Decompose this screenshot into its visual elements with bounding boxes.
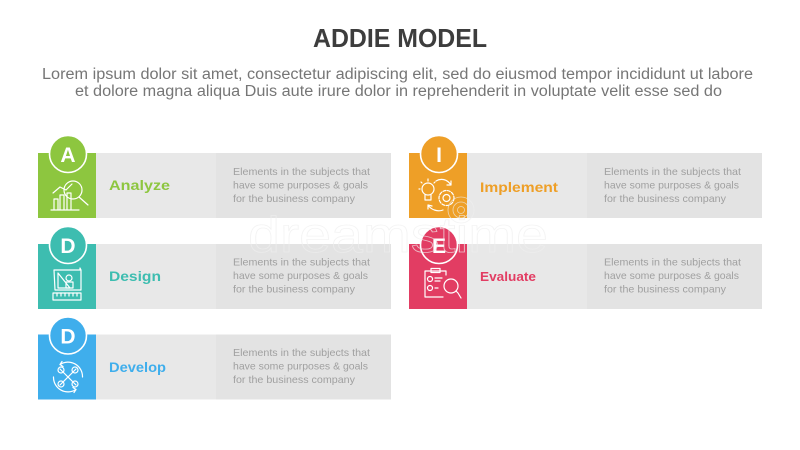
label: Analyze: Analyze — [109, 177, 170, 193]
panel: develop — [38, 317, 391, 400]
description: Analyze: have some purposes & goals — [233, 180, 368, 192]
panel: analyze — [38, 136, 391, 218]
description: Evaluate: for the business company — [604, 284, 727, 296]
description: Evaluate: have some purposes & goals — [604, 270, 739, 282]
badge: I — [420, 136, 458, 172]
description: Develop — [233, 347, 370, 386]
description: Design: have some purposes & goals — [233, 270, 368, 282]
description: Develop: for the business company — [233, 374, 356, 386]
badge: D — [50, 226, 86, 264]
badge: I: I — [436, 144, 442, 167]
badge: A — [50, 136, 86, 172]
label: Design: Design — [109, 268, 161, 284]
description: Implement: have some purposes & goals — [604, 180, 739, 192]
description: Evaluate: Elements in the subjects that — [604, 256, 741, 268]
panel: design — [38, 226, 391, 309]
description: Design — [233, 256, 370, 296]
description: Analyze: Elements in the subjects that — [233, 166, 370, 178]
badge: E: E — [432, 235, 446, 258]
badge: E — [420, 226, 458, 264]
title: ADDIE MODEL — [313, 23, 487, 53]
label: Develop: Develop — [109, 359, 166, 375]
panel: evaluate — [409, 226, 762, 309]
description: Implement: for the business company — [604, 193, 727, 205]
watermark: dreamstime — [248, 207, 548, 263]
badge: D — [50, 317, 86, 354]
badge: D: D — [60, 326, 76, 348]
icon: light bulb and gear with arrows — [419, 179, 454, 211]
icon: crossed wrenches in a circle — [53, 362, 83, 392]
badge: D: D — [60, 235, 76, 258]
subtitle text — [42, 66, 753, 100]
description: Implement: Elements in the subjects that — [604, 166, 741, 178]
subtitle text: et dolore magna aliqua Duis aute irure dolor in reprehenderit in voluptate velit esse sed do — [75, 83, 722, 100]
description: Design: Elements in the subjects that — [233, 256, 370, 268]
panel: implement — [409, 136, 762, 218]
description: Develop: have some purposes & goals — [233, 360, 368, 372]
label: Implement: Implement — [480, 179, 558, 195]
subtitle text: Lorem ipsum dolor sit amet, consectetur adipiscing elit, sed do eiusmod tempor incididunt ut labore — [42, 66, 753, 83]
description: Evaluate — [604, 256, 741, 296]
description: Design: for the business company — [233, 284, 356, 296]
icon: blueprint and ruler — [53, 268, 81, 300]
description: Analyze: for the business company — [233, 193, 356, 205]
badge: A: A — [60, 144, 76, 167]
description: Implement — [604, 166, 741, 205]
label: Evaluate: Evaluate — [480, 269, 536, 284]
icon: clipboard with magnifier — [425, 268, 461, 298]
icon: chart with magnifier — [51, 181, 88, 210]
description: Develop: Elements in the subjects that — [233, 347, 370, 359]
description: Analyze — [233, 166, 370, 205]
